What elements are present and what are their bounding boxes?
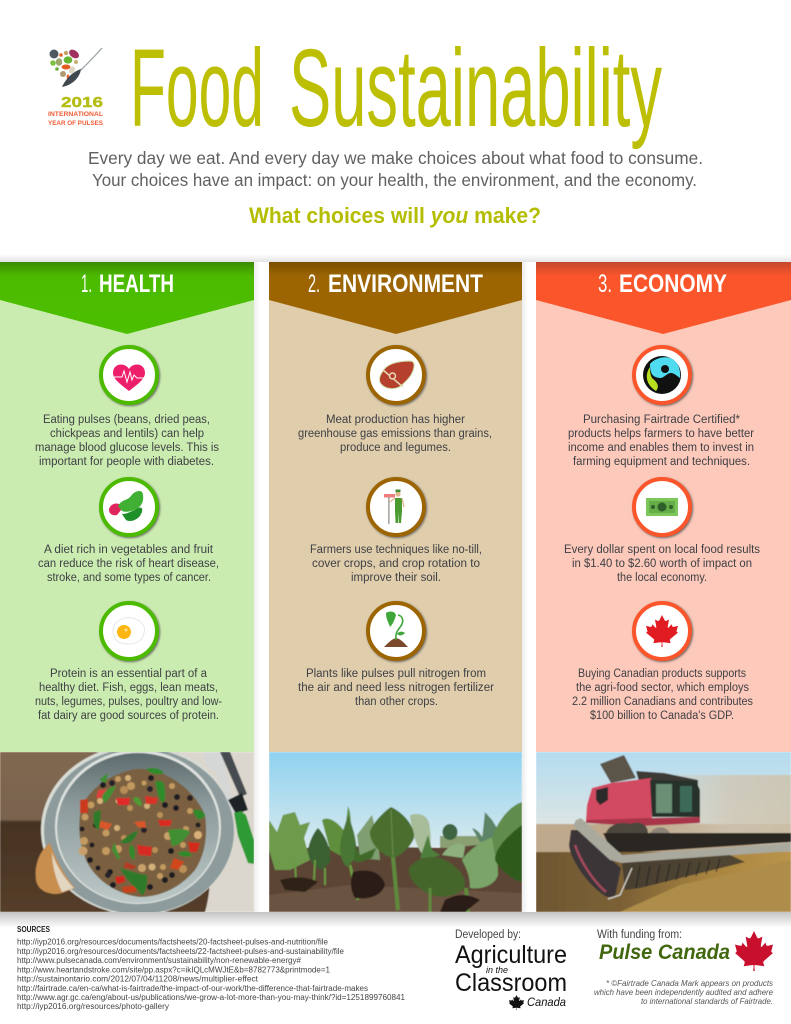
text: nitrogen: Plants like pulses pull nitrogen from bbox=[306, 668, 486, 680]
logo: International Year of Pulses: YEAR OF PULSES bbox=[48, 120, 104, 127]
icon: maple leaf bbox=[633, 602, 693, 662]
sources: http://fairtrade.ca/en-ca/what-is-fairtrade/the-impact-of-our-work/the-difference-that-fairtrade-makes bbox=[17, 984, 368, 993]
fairtrade footnote bbox=[594, 979, 774, 1006]
text: protein: fat dairy are good sources of protein. bbox=[38, 710, 219, 722]
icon: banknote bbox=[633, 478, 693, 538]
photo: salad bowl bbox=[0, 745, 254, 915]
bread bbox=[36, 843, 75, 894]
text: farmers bbox=[310, 544, 482, 584]
text: canadian products: Buying Canadian products supports bbox=[578, 668, 746, 680]
text: blood glucose: chickpeas and lentils) can help bbox=[50, 428, 204, 440]
text: protein: nuts, legumes, pulses, poultry and low- bbox=[35, 696, 222, 708]
sources: http://iyp2016.org/resources/photo-gallery bbox=[17, 1002, 169, 1011]
icon: meat bbox=[367, 346, 427, 406]
sources: http://www.heartandstroke.com/site/pp.aspx?c=ikIQLcMWJtE&b=8782773&printmode=1 bbox=[17, 965, 331, 974]
text: fairtrade: Purchasing Fairtrade Certified* bbox=[583, 414, 741, 426]
sources: http://iyp2016.org/resources/documents/factsheets/20-factsheet-pulses-and-nutrition/file bbox=[17, 938, 329, 947]
text: fairtrade bbox=[568, 414, 754, 468]
intro text: Every day we eat. And every day we make choices about what food to consume. bbox=[88, 148, 703, 168]
text: vegetables: stroke, and some types of cancer. bbox=[47, 572, 211, 584]
text: local food: the local economy. bbox=[617, 572, 707, 584]
text: nitrogen: the air and need less nitrogen fertilizer bbox=[298, 682, 494, 694]
text: fairtrade: income and enables them to invest in bbox=[568, 442, 754, 454]
fork and knife bbox=[219, 752, 254, 864]
panel: economy bbox=[536, 262, 791, 752]
heading: economy bbox=[536, 262, 791, 334]
text: local food bbox=[564, 544, 760, 584]
sources: http://www.agr.gc.ca/eng/about-us/publications/we-grow-a-lot-more-than-you-may-think/?id=1251899760841 bbox=[17, 993, 406, 1002]
photo: combine harvester bbox=[536, 752, 791, 912]
logo: agriculture in the classroom: Classroom bbox=[455, 969, 567, 997]
text: nitrogen bbox=[298, 668, 494, 708]
logo: pulse canada bbox=[597, 929, 773, 971]
logo: agriculture in the classroom: Canada bbox=[527, 995, 566, 1009]
salad bbox=[78, 768, 206, 897]
sources: http://www.pulsecanada.com/environment/sustainability/non-renewable-energy# bbox=[17, 956, 302, 965]
text: canadian products: the agri-food sector, which employs bbox=[576, 682, 749, 694]
text: vegetables bbox=[38, 544, 219, 584]
text: blood glucose bbox=[35, 414, 219, 468]
fairtrade footnote: * ©Fairtrade Canada Mark appears on products bbox=[606, 979, 773, 988]
top band shadow bbox=[0, 254, 791, 262]
heading: economy: ECONOMY bbox=[619, 270, 727, 298]
text: protein: healthy diet. Fish, eggs, lean meats, bbox=[39, 682, 218, 694]
title: Food bbox=[130, 27, 264, 150]
text: meat production: produce and legumes. bbox=[340, 442, 451, 454]
heading: environment: ENVIRONMENT bbox=[328, 270, 483, 298]
text: protein bbox=[35, 668, 222, 722]
icon: vegetables bbox=[100, 478, 160, 538]
text: farmers: improve their soil. bbox=[351, 572, 441, 584]
heading: health: 1. bbox=[81, 270, 92, 298]
fairtrade footnote: which have been independently audited and adhere bbox=[594, 988, 774, 997]
heading: environment: 2. bbox=[308, 270, 320, 298]
text: local food: in $1.40 to $2.60 worth of impact on bbox=[572, 558, 752, 570]
text: blood glucose: Eating pulses (beans, dried peas, bbox=[43, 414, 210, 426]
sources: SOURCES bbox=[17, 925, 51, 934]
panel: health bbox=[0, 262, 254, 752]
photo: seedlings in soil bbox=[269, 752, 522, 912]
text: canadian products: 2.2 million Canadians and contributes bbox=[572, 696, 753, 708]
panel: environment bbox=[269, 262, 522, 752]
footer shadow bbox=[0, 912, 791, 928]
logo: International Year of Pulses bbox=[48, 48, 104, 127]
intro text: Your choices have an impact: on your health, the environment, and the economy. bbox=[92, 170, 697, 190]
fairtrade footnote: to international standards of Fairtrade. bbox=[641, 997, 773, 1006]
text: local food: Every dollar spent on local food results bbox=[564, 544, 760, 556]
text: vegetables: A diet rich in vegetables and fruit bbox=[44, 544, 214, 556]
icon: farmer bbox=[367, 478, 427, 538]
text: blood glucose: manage blood glucose levels. This is bbox=[35, 442, 219, 454]
text: farmers: Farmers use techniques like no-till, bbox=[310, 544, 482, 556]
logo: agriculture in the classroom: in the bbox=[486, 965, 508, 976]
text: fairtrade: farming equipment and techniques. bbox=[573, 456, 750, 468]
logo: agriculture in the classroom: Developed by: bbox=[455, 929, 521, 941]
intro text bbox=[88, 148, 703, 190]
icon: seedling bbox=[367, 602, 427, 662]
text: blood glucose: important for people with diabetes. bbox=[39, 456, 214, 468]
text: farmers: cover crops, and crop rotation to bbox=[312, 558, 480, 570]
text: meat production bbox=[298, 414, 492, 454]
heading: health bbox=[0, 262, 254, 334]
text: nitrogen: than other crops. bbox=[355, 696, 438, 708]
heading: economy: 3. bbox=[598, 270, 612, 298]
icon: spoon bbox=[62, 48, 102, 87]
text: meat production: greenhouse gas emissions than grains, bbox=[298, 428, 492, 440]
logo: International Year of Pulses: 2016 bbox=[61, 94, 103, 111]
sources: http://iyp2016.org/resources/documents/factsheets/22-factsheet-pulses-and-sustainability/file bbox=[17, 947, 345, 956]
text: protein: Protein is an essential part of a bbox=[50, 668, 208, 680]
text: vegetables: can reduce the risk of heart disease, bbox=[38, 558, 219, 570]
text: meat production: Meat production has higher bbox=[326, 414, 465, 426]
logo: agriculture in the classroom: Agriculture bbox=[455, 941, 567, 969]
logo: pulse canada: Pulse Canada bbox=[599, 941, 730, 964]
icon: fairtrade mark bbox=[633, 346, 693, 406]
question heading: What choices will you make? bbox=[249, 203, 541, 228]
text: fairtrade: products helps farmers to have better bbox=[568, 428, 754, 440]
sources bbox=[17, 925, 406, 1011]
logo: pulse canada: With funding from: bbox=[597, 929, 682, 941]
heading: health: HEALTH bbox=[99, 270, 174, 298]
heading: environment bbox=[269, 262, 522, 334]
icon: egg bbox=[100, 602, 160, 662]
title bbox=[130, 27, 662, 150]
logo: International Year of Pulses: INTERNATIONAL bbox=[48, 111, 103, 118]
icon: heart bbox=[100, 346, 160, 406]
logo: agriculture in the classroom bbox=[455, 929, 567, 1010]
sources: http://sustainontario.com/2012/07/04/11208/news/multiplier-effect bbox=[17, 975, 259, 984]
text: canadian products bbox=[572, 668, 753, 722]
text: canadian products: $100 billion to Canada's GDP. bbox=[590, 710, 734, 722]
